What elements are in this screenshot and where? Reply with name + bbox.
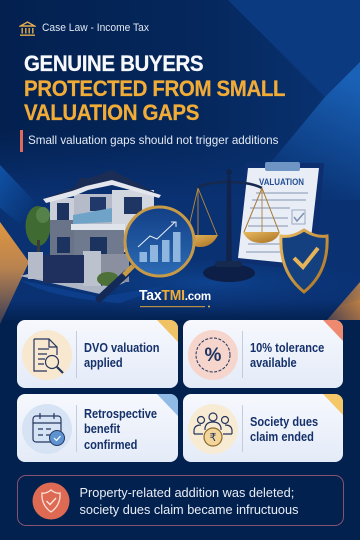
card text: Society dues [250, 414, 318, 428]
icon: people with rupee: ₹ [209, 430, 216, 444]
card text [84, 340, 160, 370]
callout text: Property-related addition was deleted; [80, 485, 294, 500]
logo underline [140, 306, 210, 308]
icon: shield check badge [32, 482, 70, 520]
card text [250, 340, 324, 370]
subtitle: Small valuation gaps should not trigger additions [28, 133, 278, 147]
icon: percent [188, 320, 343, 380]
card text [250, 414, 318, 444]
icon: people with rupee [188, 394, 343, 454]
icon: courthouse [19, 21, 36, 36]
icon: magnifying glass chart [99, 207, 194, 299]
callout [17, 475, 344, 526]
card: Society dues [182, 394, 343, 462]
card text [84, 406, 157, 452]
header label: Case Law - Income Tax [42, 22, 149, 34]
title: PROTECTED FROM SMALL [24, 76, 285, 100]
card text: DVO valuation [84, 340, 160, 354]
ground [45, 260, 360, 316]
callout text [80, 485, 298, 516]
house [28, 170, 161, 286]
icon: valuation clipboard: VALUATION [259, 177, 304, 187]
card: Retrospective benefit [17, 394, 178, 462]
icon: right scale pan [243, 188, 280, 243]
card: DVO valuation [17, 320, 178, 388]
icon: percent: % [204, 344, 221, 366]
icon: shield with check [281, 230, 327, 292]
icon: document with magnifier [22, 320, 178, 380]
card text: claim ended [250, 429, 313, 444]
logo: TaxTMI.com: TaxTMI.com [139, 288, 211, 304]
card text: applied [84, 355, 123, 370]
title: GENUINE BUYERS [24, 51, 203, 76]
icon: scales of justice [184, 169, 262, 282]
card text: Retrospective [84, 406, 157, 421]
callout text: society dues claim became infructuous [80, 502, 298, 516]
icon: calendar with check [22, 394, 178, 454]
icon: valuation clipboard [238, 162, 324, 270]
title [24, 51, 285, 125]
card text: benefit [84, 421, 120, 436]
card: 10% tolerance [182, 320, 343, 388]
card text: 10% tolerance [250, 340, 324, 354]
card text: available [250, 355, 296, 370]
header label [19, 21, 149, 36]
tree [26, 206, 50, 258]
card text: confirmed [84, 437, 137, 452]
title: VALUATION GAPS [24, 100, 199, 125]
